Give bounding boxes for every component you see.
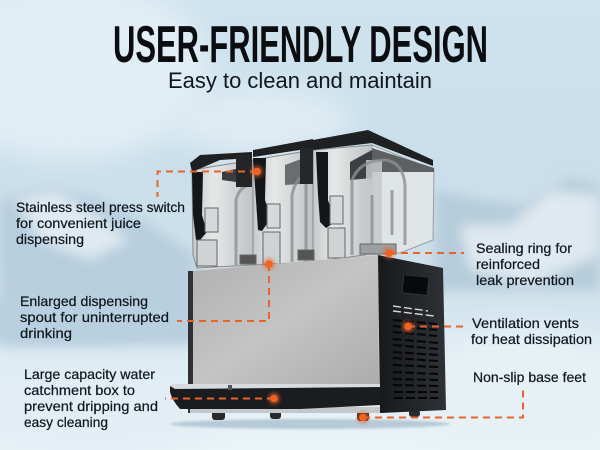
black side panel: [378, 255, 446, 413]
juice dispenser machine: [170, 130, 446, 421]
lids: [190, 130, 433, 187]
press levers: [192, 152, 335, 240]
callout: press switch: Stainless steel press switch: [16, 199, 185, 215]
callout: water catchment box: prevent dripping and: [24, 398, 158, 414]
callout: sealing ring: Sealing ring for: [476, 240, 572, 256]
callout: dispensing spout: spout for uninterrupted: [20, 309, 169, 325]
callout: water catchment box: easy cleaning: [24, 414, 108, 430]
callout: press switch: dispensing: [16, 231, 84, 247]
callout: ventilation vents: Ventilation vents: [472, 315, 579, 331]
callout: water catchment box: catchment box to: [24, 382, 135, 398]
base strip: [190, 407, 380, 413]
callout: ventilation vents: for heat dissipation: [471, 331, 592, 347]
callout: press switch: for convenient juice: [16, 215, 141, 231]
callout: dispensing spout: [20, 258, 275, 341]
steel front panel: [193, 255, 379, 386]
subtitle: Easy to clean and maintain: [168, 68, 432, 93]
callout: water catchment box: Large capacity water: [24, 366, 155, 382]
callout: base feet: Non-slip base feet: [473, 369, 586, 385]
callout: dispensing spout: drinking: [20, 325, 72, 341]
callout: sealing ring: [383, 240, 574, 288]
inner paddles: [236, 160, 405, 265]
drip tray: [170, 384, 380, 409]
tanks: [192, 145, 434, 268]
callout: ventilation vents: [402, 315, 592, 347]
callout: sealing ring: leak prevention: [476, 272, 574, 288]
callout: press switch: [16, 166, 263, 247]
callout: sealing ring: reinforced: [476, 256, 540, 272]
left post: [188, 271, 193, 413]
callout: base feet: [357, 369, 586, 424]
feet: [212, 410, 420, 421]
callout: dispensing spout: Enlarged dispensing: [20, 293, 148, 309]
callout: water catchment box: [24, 366, 280, 430]
spouts: [197, 196, 396, 266]
